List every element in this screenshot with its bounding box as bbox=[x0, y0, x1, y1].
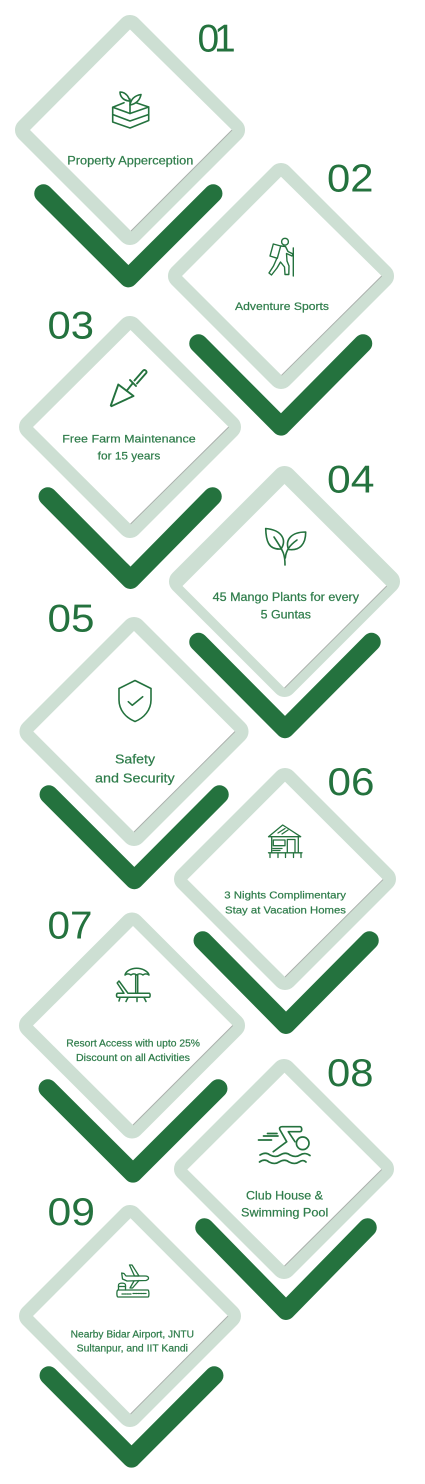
number 02: 02 bbox=[327, 158, 374, 201]
label bbox=[213, 592, 359, 621]
icon: airplane and airport bbox=[117, 1265, 149, 1297]
panel: 04 45 Mango Plants bbox=[164, 458, 405, 729]
diamond frame 06 bbox=[169, 763, 401, 995]
chevron 01 bbox=[44, 194, 213, 278]
label bbox=[95, 752, 176, 785]
icon: trowel bbox=[111, 370, 147, 406]
label: for 15 years bbox=[98, 450, 161, 462]
panel: 05 Safety and Security bbox=[14, 598, 254, 880]
icon: shield with check bbox=[119, 680, 151, 722]
chevron 03 bbox=[48, 496, 212, 580]
number 03: 03 bbox=[48, 304, 94, 347]
label: Discount on all Activities bbox=[76, 1053, 190, 1064]
icon: swimmer bbox=[258, 1127, 310, 1164]
label: Resort Access with upto 25% bbox=[66, 1039, 200, 1050]
diamond frame 03 bbox=[14, 311, 246, 543]
diamond frame 04 bbox=[164, 461, 405, 702]
panel: 07 Resort Access bbox=[14, 904, 250, 1173]
label: and Security bbox=[95, 771, 176, 785]
chevron 07 bbox=[48, 1088, 218, 1173]
number 05: 05 bbox=[48, 598, 94, 641]
diamond frame 01 bbox=[10, 10, 250, 250]
diamond frame 02 bbox=[163, 158, 399, 394]
number 06: 06 bbox=[328, 761, 374, 804]
label bbox=[71, 1330, 194, 1355]
number 04: 04 bbox=[327, 458, 374, 501]
number 07: 07 bbox=[48, 904, 92, 947]
label bbox=[241, 1189, 328, 1219]
chevron 08 bbox=[204, 1228, 368, 1311]
label: Free Farm Maintenance bbox=[62, 434, 196, 446]
chevron 06 bbox=[203, 940, 370, 1025]
label: Swimming Pool bbox=[241, 1205, 328, 1219]
label: Adventure Sports bbox=[235, 301, 330, 313]
label bbox=[66, 1039, 200, 1064]
panel: 09 Nearby Bidar Airport bbox=[14, 1191, 246, 1458]
panel: 08 Club House and Swimming Pool bbox=[169, 1052, 399, 1311]
label: Property Apperception bbox=[67, 156, 193, 168]
chevron 04 bbox=[198, 642, 372, 729]
diamond frame 09 bbox=[14, 1200, 246, 1432]
icon: sun lounger with umbrella bbox=[116, 968, 150, 1002]
label: Safety bbox=[115, 752, 156, 766]
label: 3 Nights Complimentary bbox=[224, 889, 347, 901]
label bbox=[224, 889, 347, 916]
label: 5 Guntas bbox=[261, 609, 311, 621]
label bbox=[62, 434, 196, 462]
icon: hiker bbox=[269, 238, 293, 276]
label: 45 Mango Plants for every bbox=[213, 592, 359, 604]
number 09: 09 bbox=[48, 1191, 95, 1234]
number 08: 08 bbox=[327, 1052, 374, 1095]
diamond frame 08 bbox=[169, 1054, 399, 1284]
label: Sultanpur, and IIT Kandi bbox=[77, 1344, 188, 1355]
diamond frame 07 bbox=[14, 907, 250, 1144]
icon: vacation house on stilts bbox=[268, 825, 302, 858]
panel: 01 Property Apperception bbox=[10, 10, 250, 278]
icon: soil layers with sprout bbox=[113, 92, 149, 128]
panel: 06 3 Nights Complimentary Stay bbox=[169, 761, 401, 1025]
number 01: 01 bbox=[198, 18, 236, 61]
chevron 02 bbox=[198, 344, 363, 426]
panel: 02 Adventure Sports bbox=[163, 158, 399, 426]
icon: two-leaf plant bbox=[266, 528, 306, 565]
diamond frame 05 bbox=[14, 612, 254, 851]
chevron 05 bbox=[49, 794, 219, 880]
panel: 03 Free Farm Maintenance bbox=[14, 304, 246, 580]
label: Stay at Vacation Homes bbox=[225, 904, 346, 916]
chevron 09 bbox=[49, 1376, 214, 1458]
label: Club House & bbox=[246, 1189, 323, 1203]
label: Nearby Bidar Airport, JNTU bbox=[71, 1330, 194, 1341]
